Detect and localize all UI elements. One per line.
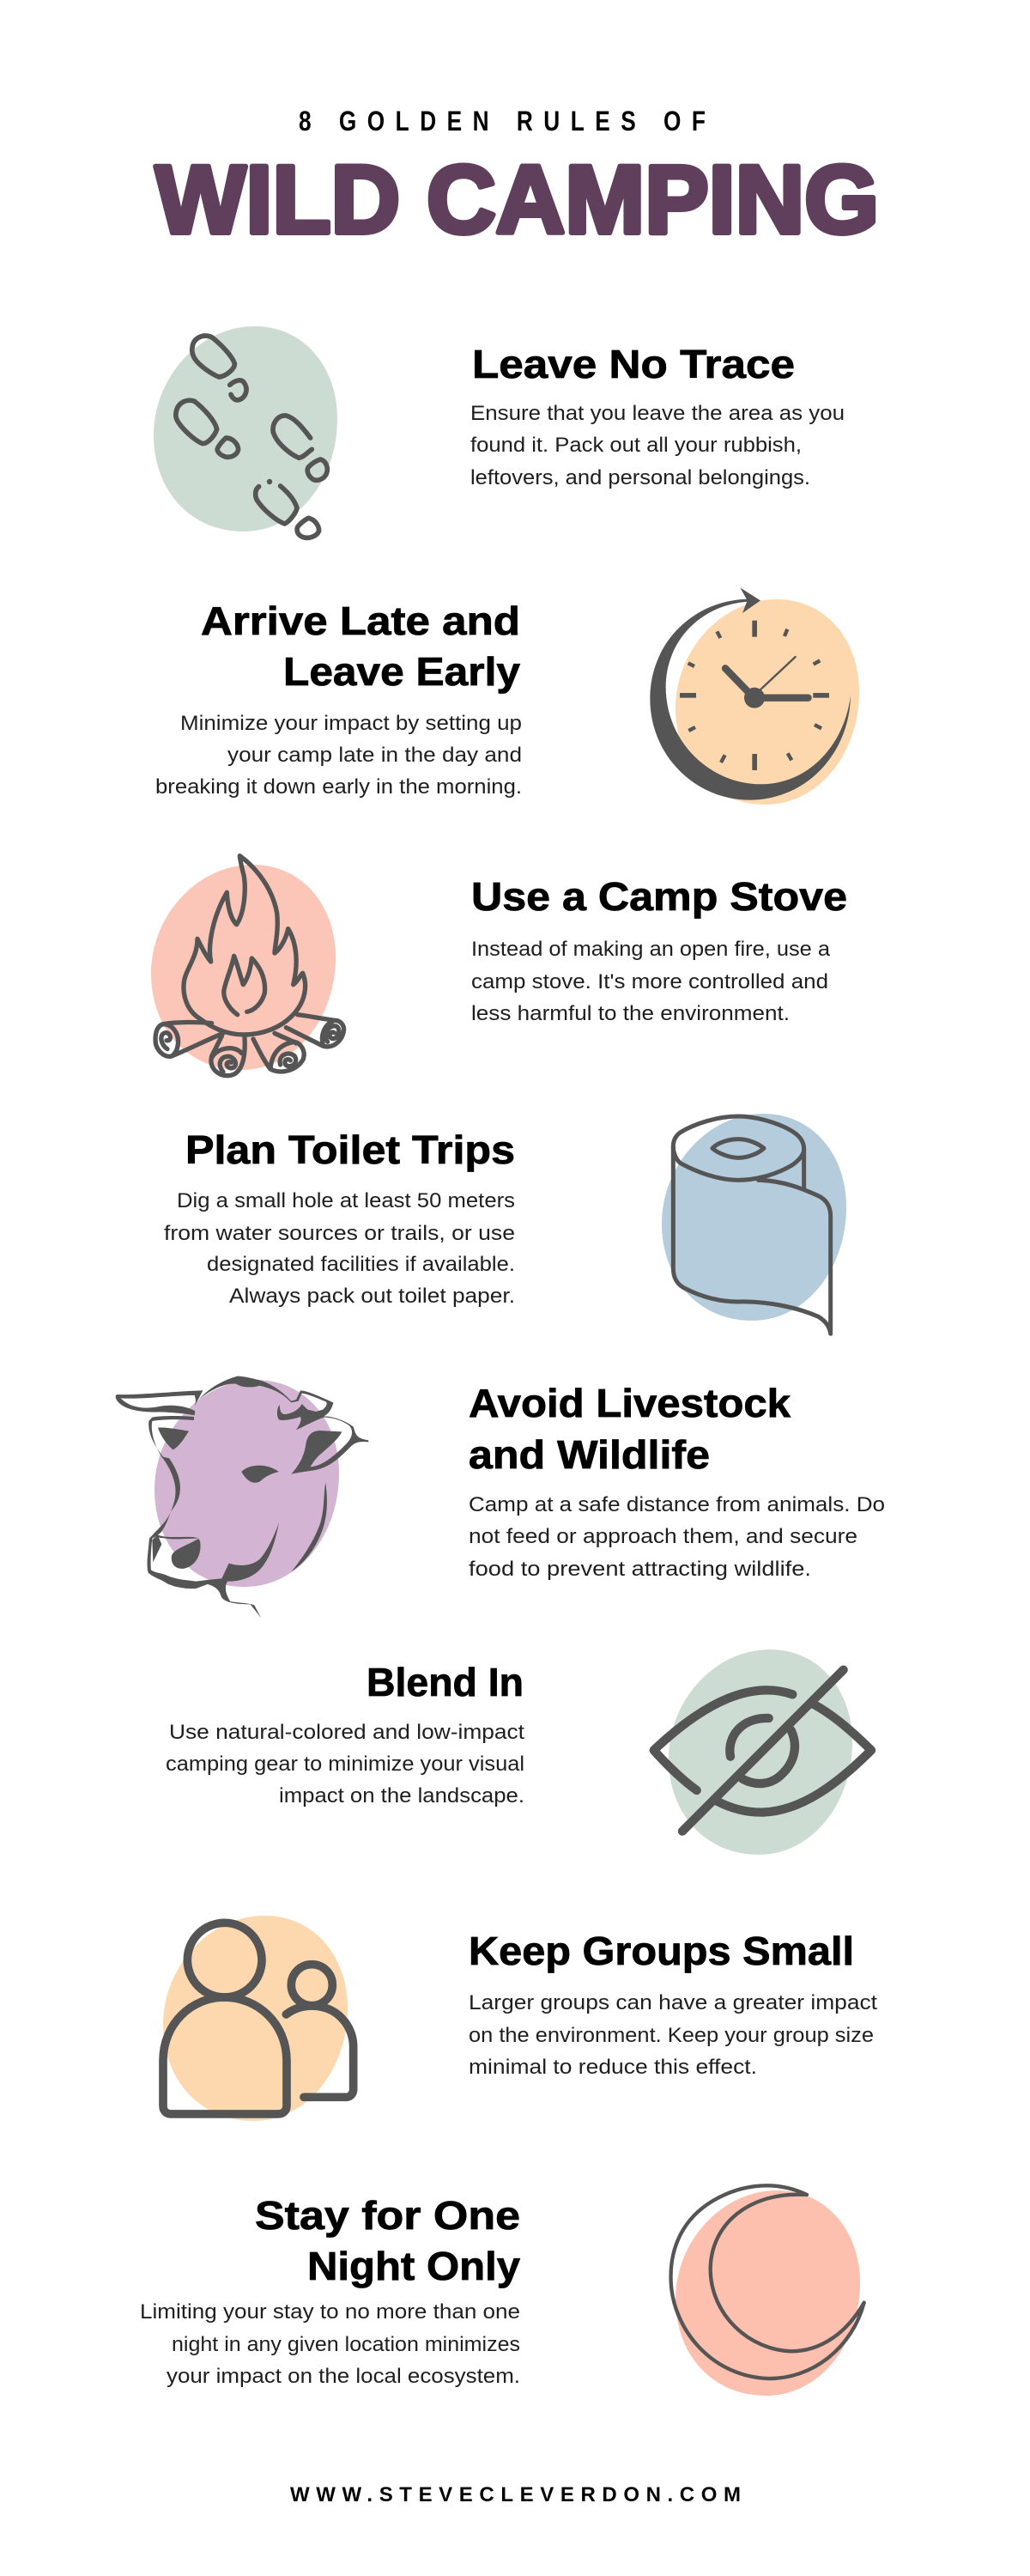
cow snout and jaw (148, 1511, 279, 1618)
body text: Always pack out toilet paper. (229, 1285, 515, 1308)
heading: Arrive Late and (201, 598, 520, 643)
panel: one night (140, 2185, 864, 2396)
heading: Plan Toilet Trips (185, 1127, 515, 1172)
icon: toilet roll (662, 1114, 846, 1334)
panel: leave no trace (154, 326, 845, 538)
icon: crossed eye (654, 1649, 871, 1855)
main title: WILD CAMPING (155, 146, 879, 253)
heading (201, 598, 520, 694)
body text (469, 1991, 877, 2079)
body text: camping gear to minimize your visual (166, 1753, 524, 1776)
icon: clock (650, 587, 859, 805)
body text: Minimize your impact by setting up (180, 712, 522, 735)
body text (164, 1189, 515, 1308)
heading: Keep Groups Small (469, 1929, 854, 1973)
body text: breaking it down early in the morning. (155, 775, 522, 799)
heading: Leave No Trace (472, 342, 795, 386)
body text: found it. Pack out all your rubbish, (470, 434, 802, 457)
body text: Instead of making an open fire, use a (471, 938, 831, 961)
heading: Avoid Livestock (469, 1381, 791, 1425)
heading: Blend In (367, 1660, 524, 1704)
heading: Leave Early (283, 649, 520, 694)
body text: Ensure that you leave the area as you (470, 402, 845, 425)
body text (140, 2300, 520, 2388)
heading: Stay for One (255, 2193, 520, 2238)
heading: Night Only (307, 2244, 520, 2288)
body text: your camp late in the day and (227, 744, 522, 767)
panel: small groups (163, 1916, 877, 2121)
panel: livestock (116, 1376, 885, 1618)
icon: campfire (151, 856, 344, 1076)
icon: moon (671, 2185, 864, 2396)
body text: Camp at a safe distance from animals. Do (469, 1493, 885, 1516)
body text (166, 1721, 524, 1807)
body text: Dig a small hole at least 50 meters (177, 1189, 515, 1212)
body text (469, 1493, 885, 1581)
body text: leftovers, and personal belongings. (470, 466, 810, 489)
panel: toilet trips (164, 1114, 846, 1334)
subtitle: 8 GOLDEN RULES OF (299, 107, 706, 137)
body text: Use natural-colored and low-impact (169, 1721, 524, 1744)
heading: and Wildlife (469, 1432, 710, 1477)
panel: blend in (166, 1649, 871, 1855)
body text: camp stove. It's more controlled and (471, 970, 828, 993)
body text (470, 402, 845, 489)
body text: your impact on the local ecosystem. (167, 2365, 520, 2388)
body text: impact on the landscape. (279, 1784, 524, 1807)
heading: Use a Camp Stove (471, 874, 847, 919)
body text: food to prevent attracting wildlife. (469, 1558, 811, 1581)
body text (155, 712, 522, 799)
body text: from water sources or trails, or use (164, 1222, 515, 1245)
icon: footprints (154, 326, 337, 538)
body text: night in any given location minimizes (172, 2333, 520, 2356)
body text: Limiting your stay to no more than one (140, 2300, 520, 2324)
title (155, 107, 879, 253)
icon: people (163, 1916, 354, 2121)
panel: arrive late (155, 587, 859, 805)
heading (469, 1381, 791, 1477)
heading (255, 2193, 520, 2288)
icon: cow head (116, 1376, 368, 1618)
panel: camp stove (151, 856, 847, 1076)
body text: not feed or approach them, and secure (469, 1525, 857, 1548)
body text: Larger groups can have a greater impact (469, 1991, 877, 2014)
cow ear and horn (258, 1380, 368, 1474)
body text: minimal to reduce this effect. (469, 2056, 757, 2079)
body text: designated facilities if available. (207, 1253, 515, 1276)
body text (471, 938, 831, 1025)
footer url: WWW.STEVECLEVERDON.COM (290, 2483, 741, 2506)
body text: less harmful to the environment. (471, 1002, 790, 1025)
body text: on the environment. Keep your group size (469, 2024, 874, 2047)
